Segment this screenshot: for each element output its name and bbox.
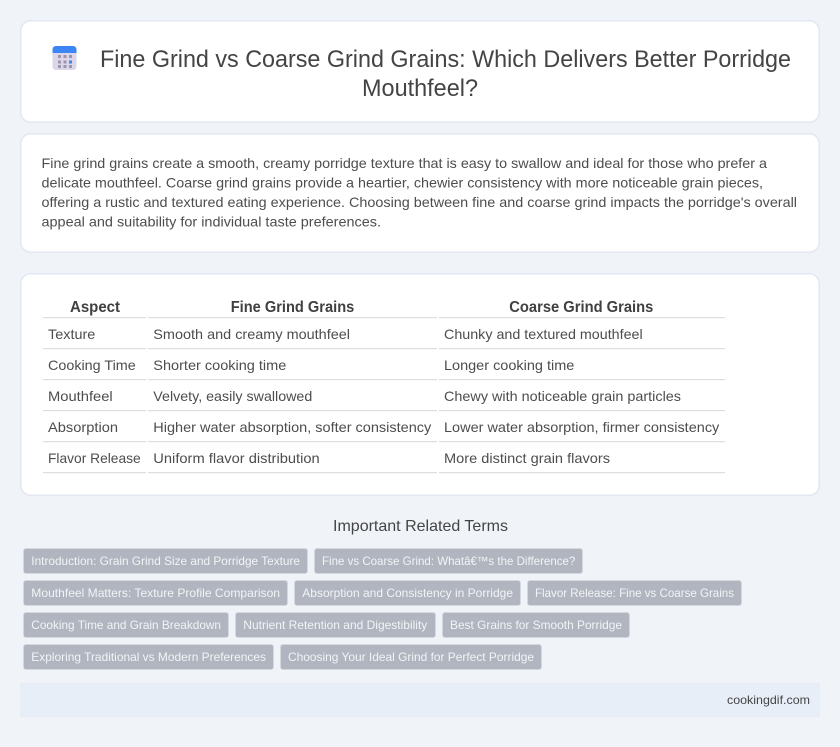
tag: flavor release: Flavor Release: Fine vs Coarse Grains [535, 586, 734, 600]
tag: absorption: Absorption and Consistency in Porridge [302, 586, 513, 600]
heading: related terms: Important Related Terms [333, 518, 508, 535]
table header row: Fine Grind Grains [231, 299, 354, 316]
table row: Flavor Release: Flavor Release [48, 450, 141, 466]
tag: nutrient retention: Nutrient Retention and Digestibility [243, 618, 427, 632]
table row: Flavor Release [43, 450, 725, 473]
summary paragraph: Fine grind grains create a smooth, creamy porridge texture that is easy to swallow and ideal for those who prefer a [42, 155, 767, 171]
tag: mouthfeel matters [24, 580, 288, 606]
panel: summary text card [21, 134, 819, 252]
table row: Flavor Release: Uniform flavor distribution [153, 450, 320, 466]
tag: traditional vs modern [24, 644, 274, 670]
table row: Flavor Release: More distinct grain flavors [444, 450, 610, 466]
tag: mouthfeel matters: Mouthfeel Matters: Texture Profile Comparison [31, 586, 280, 600]
table row: Cooking Time: Cooking Time [48, 357, 136, 373]
table row: Cooking Time: Shorter cooking time [153, 357, 287, 373]
tag: introduction [24, 548, 308, 574]
table row: Texture [43, 326, 725, 349]
table row: Absorption [43, 419, 725, 442]
table row: Absorption: Lower water absorption, firmer consistency [444, 419, 719, 435]
title [100, 46, 791, 102]
tag: cooking time [24, 612, 228, 638]
title: Mouthfeel? [362, 75, 478, 102]
summary paragraph [42, 155, 797, 230]
table row: Texture: Texture [48, 326, 96, 342]
table row: Cooking Time: Longer cooking time [444, 357, 575, 373]
tag: flavor release [528, 580, 742, 606]
panel: title card [21, 21, 819, 122]
summary paragraph: delicate mouthfeel. Coarse grind grains provide a heartier, chewier consistency with more noticeable grain pieces, [42, 174, 763, 190]
tag: choosing grind [280, 644, 542, 670]
related term tags [24, 548, 742, 670]
table row: Texture: Smooth and creamy mouthfeel [153, 326, 350, 342]
panel: comparison table card [21, 274, 819, 495]
footer bar [20, 683, 820, 717]
tag: introduction: Introduction: Grain Grind Size and Porridge Texture [31, 554, 300, 568]
tag: absorption [294, 580, 520, 606]
table header row: Coarse Grind Grains [509, 299, 653, 316]
tag: fine vs coarse [314, 548, 582, 574]
table row: Mouthfeel: Velvety, easily swallowed [153, 388, 312, 404]
table row: Absorption: Higher water absorption, softer consistency [153, 419, 431, 435]
table row: Mouthfeel: Mouthfeel [48, 388, 113, 404]
table row: Texture: Chunky and textured mouthfeel [444, 326, 643, 342]
summary paragraph: appeal and suitability for individual taste preferences. [42, 214, 381, 230]
footer source text: cookingdif.com [727, 693, 810, 707]
tag: best grains [442, 612, 630, 638]
tag: nutrient retention [236, 612, 436, 638]
tag: traditional vs modern: Exploring Traditional vs Modern Preferences [31, 650, 266, 664]
tag: best grains: Best Grains for Smooth Porridge [450, 618, 622, 632]
table row: Mouthfeel [43, 388, 725, 411]
table row: Mouthfeel: Chewy with noticeable grain particles [444, 388, 681, 404]
icon: calendar grid [52, 46, 76, 70]
tag: cooking time: Cooking Time and Grain Breakdown [31, 618, 221, 632]
tag: fine vs coarse: Fine vs Coarse Grind: Whatâ€™s the Difference? [322, 554, 576, 568]
tag: choosing grind: Choosing Your Ideal Grind for Perfect Porridge [288, 650, 534, 664]
table row: Cooking Time [43, 357, 725, 380]
table header row [43, 299, 725, 318]
summary paragraph: offering a rustic and textured eating experience. Choosing between fine and coarse grind impacts the porridge's overall [42, 194, 797, 210]
table row: Absorption: Absorption [48, 419, 118, 435]
table header row: Aspect [70, 299, 121, 316]
title: Fine Grind vs Coarse Grind Grains: Which Delivers Better Porridge [100, 46, 791, 73]
